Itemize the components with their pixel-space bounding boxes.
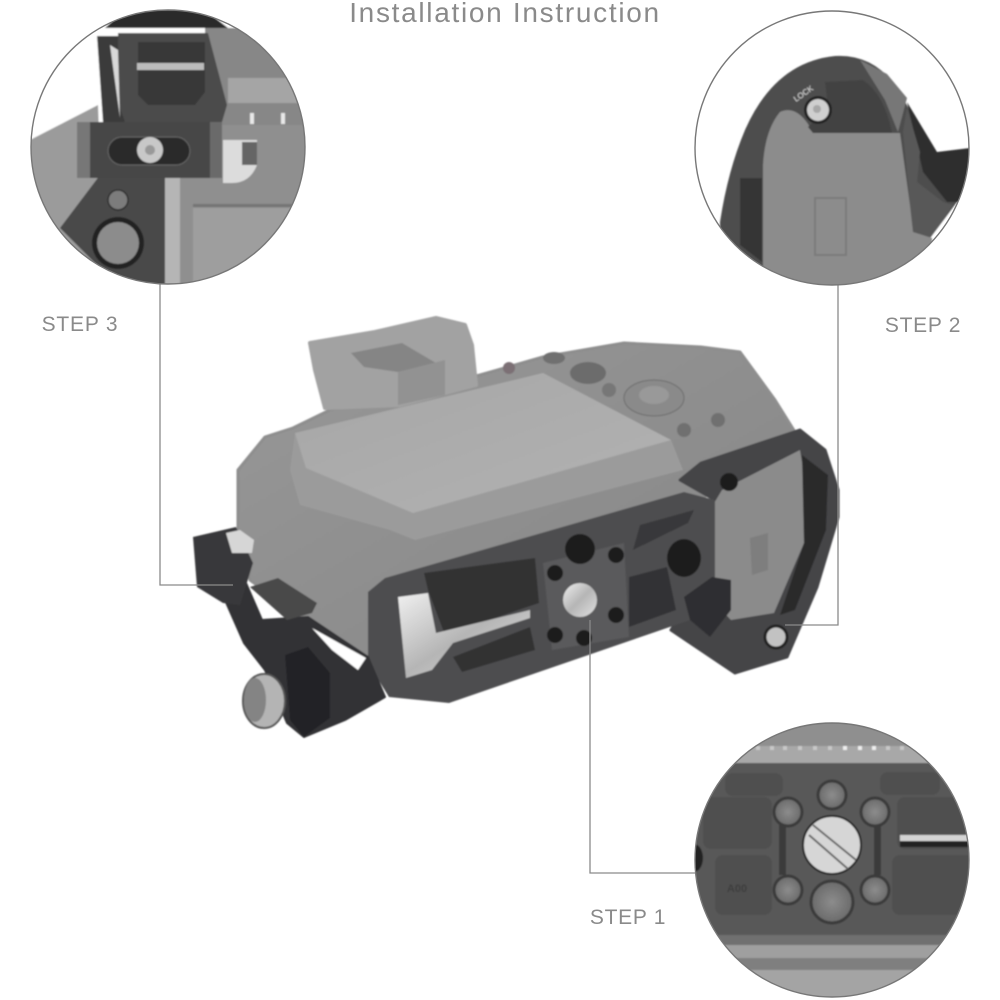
latch xyxy=(118,33,227,122)
panel ticks xyxy=(250,113,254,124)
viewfinder eyecup xyxy=(310,318,476,408)
door slot xyxy=(815,198,846,255)
clamp screw xyxy=(137,137,163,163)
grip frame xyxy=(720,56,957,288)
panel: step 3 detail xyxy=(30,10,310,293)
right camera side xyxy=(179,129,304,283)
threaded holes xyxy=(774,781,889,923)
left dark hole xyxy=(696,844,704,872)
dark arm xyxy=(97,36,125,122)
camera controls xyxy=(503,352,725,437)
leader line: step 3 xyxy=(160,284,233,585)
tripod screw xyxy=(563,583,597,617)
light edge strip xyxy=(165,175,180,288)
top black bar xyxy=(105,10,228,28)
lock mark: LOCK xyxy=(792,83,816,104)
grip inner shadow xyxy=(780,455,828,615)
silver knob xyxy=(223,140,257,183)
main plate xyxy=(690,763,975,935)
label: step 3: STEP 3 xyxy=(42,313,118,336)
camera body xyxy=(238,343,795,665)
leader line: step 1 xyxy=(590,620,696,873)
frame highlight xyxy=(860,60,907,132)
left clamp block xyxy=(193,527,253,605)
clamp frame xyxy=(225,560,385,737)
indicator dots xyxy=(756,746,904,750)
bottom bands xyxy=(690,935,975,945)
silver thumb screw xyxy=(226,530,254,553)
channels xyxy=(779,825,786,875)
recesses xyxy=(703,772,975,915)
door xyxy=(763,110,932,290)
latch bar xyxy=(137,63,204,70)
left camera surface xyxy=(32,104,100,263)
lower clamp xyxy=(285,647,330,737)
lower left recess xyxy=(453,627,535,672)
right arm xyxy=(903,108,953,238)
grip door xyxy=(710,450,808,620)
silver latch xyxy=(398,593,530,678)
circle outline: step 2 xyxy=(695,11,969,285)
label: step 2: STEP 2 xyxy=(885,314,961,337)
left dark bar xyxy=(740,178,762,262)
circle outline: step 1 xyxy=(695,723,969,997)
panel: step 2 detail xyxy=(720,56,970,290)
clamp slot xyxy=(108,137,190,165)
white gap between rails xyxy=(312,628,366,670)
textured inset xyxy=(193,208,290,281)
threaded holes xyxy=(547,473,738,646)
latch window xyxy=(138,42,205,105)
label: step 1: STEP 1 xyxy=(590,906,666,929)
upper right recess xyxy=(633,510,694,550)
lock screw xyxy=(804,96,832,124)
right camera top xyxy=(205,28,310,130)
right dark mechanism xyxy=(907,102,970,202)
large button xyxy=(92,217,144,269)
mount plate xyxy=(543,543,629,650)
top bands xyxy=(756,724,908,747)
lock screw xyxy=(765,626,787,648)
upper left recess xyxy=(424,558,539,635)
dot pattern strip xyxy=(228,78,298,103)
rear screen xyxy=(295,373,671,513)
knurled knob xyxy=(243,674,285,728)
centre screw xyxy=(803,816,861,874)
screen bezel xyxy=(290,373,683,540)
leader line: step 2 xyxy=(785,285,838,625)
grip frame of cage xyxy=(671,430,838,673)
top rail block xyxy=(250,578,317,620)
lower dark plate xyxy=(60,175,165,288)
circle outline: step 3 xyxy=(31,10,305,284)
lever xyxy=(684,577,731,637)
white sky xyxy=(96,19,234,124)
door slot xyxy=(750,533,768,575)
A00 mark: A00 xyxy=(727,883,747,895)
cage bottom plate xyxy=(368,492,715,703)
clamp block xyxy=(89,120,211,179)
lower right recess xyxy=(629,567,676,627)
silver slit xyxy=(900,835,975,841)
upper inner panel xyxy=(808,80,892,133)
small button xyxy=(108,190,128,210)
panel: step 1 detail xyxy=(685,720,975,1000)
camera with cage illustration xyxy=(193,318,838,737)
